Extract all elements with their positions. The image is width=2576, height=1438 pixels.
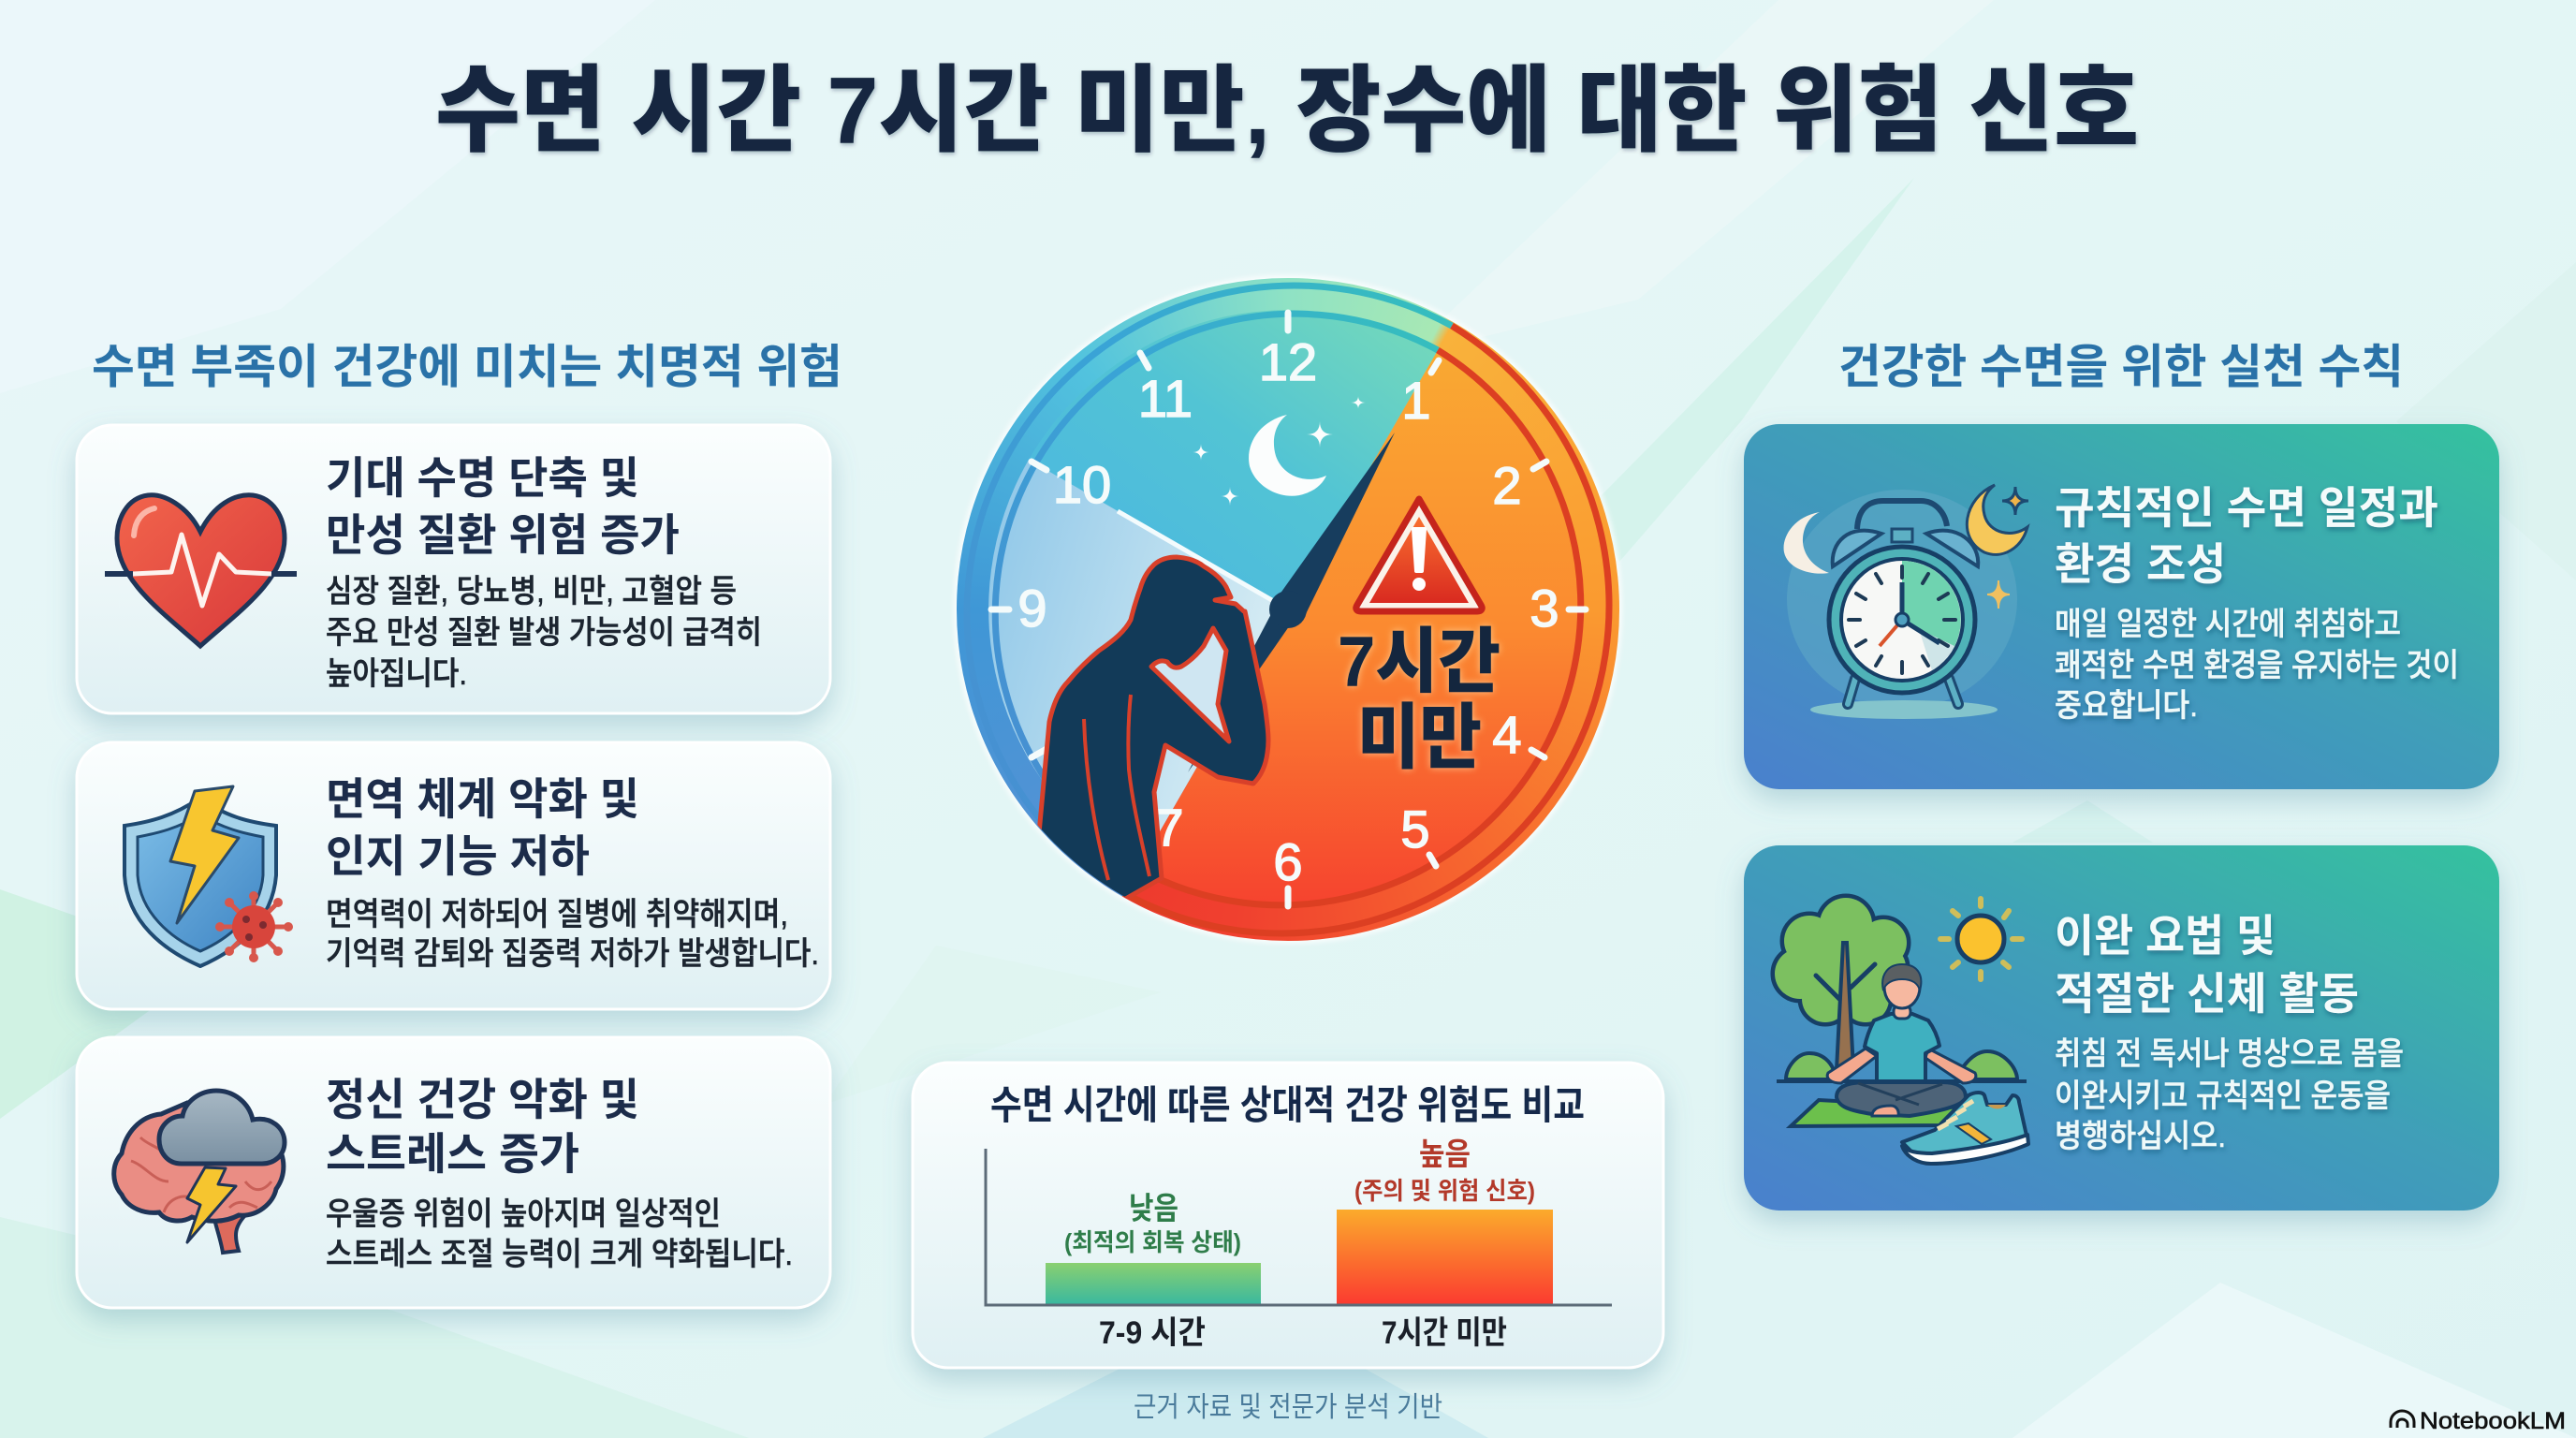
label: under seven hours: 7시간	[1338, 623, 1500, 702]
clock numerals: 3	[1530, 579, 1559, 638]
card body: 높아집니다.	[326, 656, 467, 692]
card body	[2055, 607, 2459, 724]
icon: heart with pulse	[105, 495, 297, 646]
card body: 주요 만성 질환 발생 가능성이 급격히	[326, 615, 762, 651]
clock face: pale sector	[988, 460, 1288, 869]
card title: 인지 기능 저하	[326, 831, 590, 881]
card title	[326, 453, 680, 560]
label: under seven hours	[1338, 623, 1500, 778]
clock numerals: 11	[1138, 369, 1193, 428]
card body: 쾌적한 수면 환경을 유지하는 것이	[2055, 648, 2459, 683]
clock face: night sky sector	[1029, 310, 1438, 609]
heading: left column: 수면 부족이 건강에 미치는 치명적 위험	[92, 341, 842, 393]
card body	[326, 1196, 793, 1272]
icon: warning triangle	[1356, 499, 1482, 611]
panel: lifespan and chronic disease	[77, 425, 830, 713]
icon: alarm clock with moons	[1784, 485, 2028, 719]
card title	[2055, 483, 2438, 589]
source note: 근거 자료 및 전문가 분석 기반	[1134, 1392, 1442, 1423]
card title	[2055, 911, 2359, 1019]
card title: 만성 질환 위험 증가	[326, 510, 680, 560]
panel: regular sleep schedule	[1744, 424, 2499, 789]
panel: relaxation and activity	[1744, 845, 2499, 1211]
card body: 심장 질환, 당뇨병, 비만, 고혈압 등	[326, 574, 737, 609]
clock numerals: 4	[1492, 705, 1522, 764]
silhouette: tired person holding head	[1039, 557, 1268, 901]
card body	[326, 897, 819, 972]
clock hand	[1188, 433, 1395, 772]
card title: 면역 체계 악화 및	[326, 774, 639, 824]
icon: meditating person with tree, sun and shoe	[1775, 898, 2028, 1164]
chart axes	[986, 1149, 1612, 1305]
card title: 기대 수명 단축 및	[326, 453, 639, 503]
card body: 면역력이 저하되어 질병에 취약해지며,	[326, 897, 788, 932]
card body: 우울증 위험이 높아지며 일상적인	[326, 1196, 721, 1232]
clock ticks	[991, 313, 1586, 906]
clock numerals: 1	[1401, 371, 1431, 430]
clock numerals: 7	[1154, 798, 1184, 857]
card body: 병행하십시오.	[2055, 1119, 2226, 1154]
title: 수면 시간 7시간 미만, 장수에 대한 위험 신호	[435, 59, 2139, 164]
clock numerals: 12	[1259, 332, 1317, 391]
card title: 이완 요법 및	[2055, 911, 2276, 961]
icon: brain with storm cloud	[114, 1091, 285, 1253]
label: under seven hours: 미만	[1357, 698, 1482, 778]
label: under seven hours: 미만	[1357, 698, 1482, 778]
bar: under 7 hours	[1337, 1137, 1553, 1351]
icon: shield with bolt and virus	[124, 786, 293, 966]
card title: 환경 조성	[2055, 539, 2226, 589]
clock face: orange risk sector	[1138, 350, 1581, 905]
clock numerals: 5	[1400, 800, 1430, 858]
card body: 중요합니다.	[2055, 688, 2198, 724]
bar: 7-9 hours: (최적의 회복 상태)	[1064, 1228, 1241, 1256]
clock numerals: 2	[1492, 456, 1522, 515]
bar: 7-9 hours	[1046, 1191, 1261, 1351]
logo: NotebookLM: NotebookLM	[2420, 1408, 2566, 1434]
clock rim lines	[967, 286, 1609, 933]
heading: right column: 건강한 수면을 위한 실천 수칙	[1838, 341, 2404, 393]
card body: 스트레스 조절 능력이 크게 약화됩니다.	[326, 1237, 793, 1272]
panel: relative risk bar chart	[913, 1063, 1663, 1368]
card title	[326, 774, 639, 881]
chart title: 수면 시간에 따른 상대적 건강 위험도 비교	[990, 1083, 1585, 1127]
clock: seven-hour warning dial	[953, 275, 1623, 945]
card title: 정신 건강 악화 및	[326, 1075, 639, 1124]
panel: immune and cognition	[77, 742, 830, 1009]
card body: 취침 전 독서나 명상으로 몸을	[2055, 1036, 2404, 1072]
clock numerals: 9	[1017, 579, 1047, 638]
card title: 적절한 신체 활동	[2055, 969, 2359, 1019]
bar: under 7 hours: 7시간 미만	[1382, 1315, 1507, 1351]
clock numerals: 10	[1053, 455, 1111, 514]
card title: 스트레스 증가	[326, 1129, 579, 1179]
card body	[2055, 1036, 2404, 1154]
clock numerals: 6	[1273, 832, 1303, 891]
bar: 7-9 hours: 7-9 시간	[1099, 1315, 1206, 1351]
panel: mental health and stress	[77, 1037, 830, 1308]
clock numerals	[1017, 332, 1559, 891]
card body: 매일 일정한 시간에 취침하고	[2055, 607, 2401, 642]
card body: 기억력 감퇴와 집중력 저하가 발생합니다.	[326, 936, 819, 972]
card body: 이완시키고 규칙적인 운동을	[2055, 1078, 2391, 1114]
bar: under 7 hours: 높음	[1419, 1137, 1471, 1171]
card title	[326, 1075, 639, 1179]
label: under seven hours: 7시간	[1338, 623, 1500, 702]
icon: crescent moon and stars	[1193, 396, 1366, 506]
bar: under 7 hours: (주의 및 위험 신호)	[1354, 1177, 1535, 1205]
bar: 7-9 hours: 낮음	[1129, 1191, 1178, 1225]
card body	[326, 574, 762, 692]
card title: 규칙적인 수면 일정과	[2055, 483, 2438, 533]
